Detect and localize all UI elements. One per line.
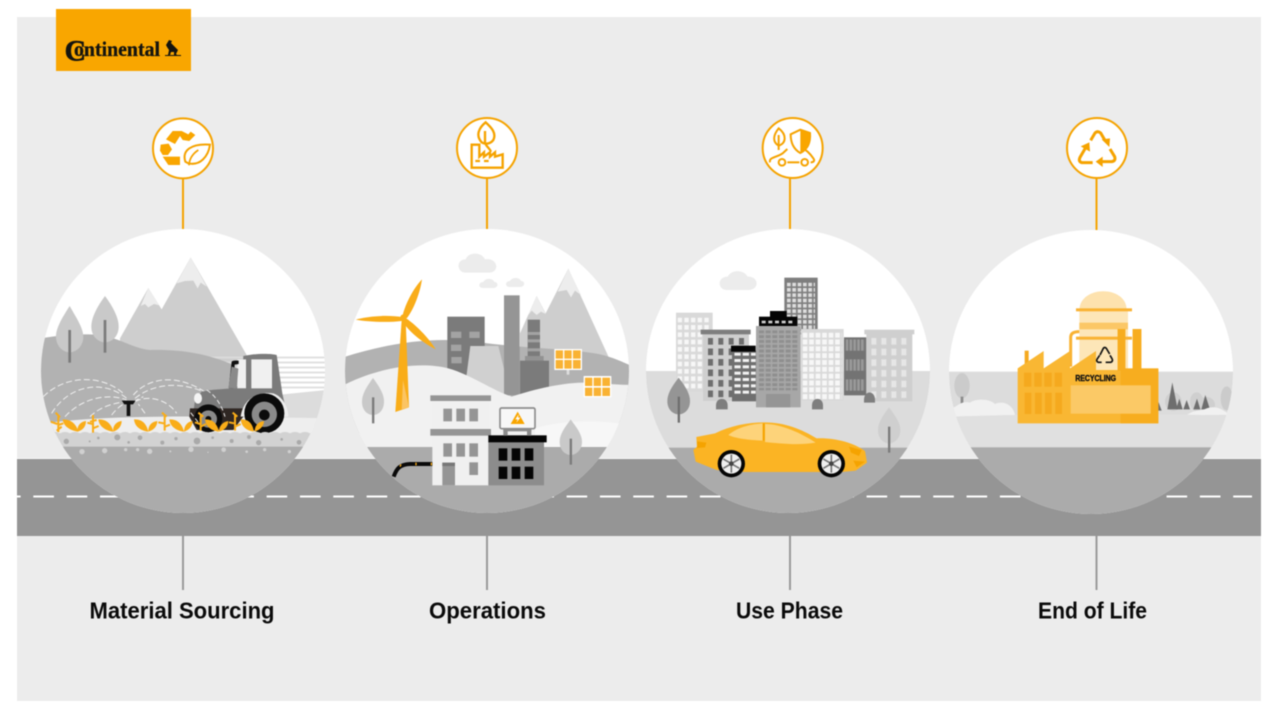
silo [1079,291,1127,310]
buildings [784,278,818,334]
wind turbine [356,279,436,412]
panel: end of life scene [949,230,1233,514]
cloud [720,271,757,290]
trees [56,306,83,352]
label: end of life: End of Life [1038,598,1147,624]
logo: Continental: ontinental [74,37,160,61]
icon: car, leaf and shield [763,118,823,178]
front hill [345,364,628,447]
rooftop [759,317,797,326]
mountains [520,276,608,357]
tractor [189,354,288,433]
factory [1018,329,1158,423]
icon: recycling triangle [1067,118,1127,178]
road [0,458,1261,536]
trees [362,378,384,415]
snow caps [141,257,207,307]
panel: operations scene [344,228,630,514]
snow caps [528,269,581,315]
cable [394,464,432,477]
label: use phase: Use Phase [736,598,843,624]
soil stones [64,434,301,445]
stripes [210,357,327,388]
back hill [344,340,630,397]
mountains [120,257,247,367]
logo: Continental [56,9,191,71]
icon: factory and leaf [457,118,517,178]
charging sign [500,408,535,436]
office building [432,446,489,486]
soil [55,431,310,448]
buildings [447,317,485,380]
dark building [488,442,544,485]
sprinkler [122,401,136,416]
bushes [716,392,875,409]
bushes [950,400,1015,417]
factory: RECYCLING [1075,373,1116,383]
label: operations: Operations [429,598,546,624]
clouds [459,254,524,288]
solar panels [554,349,582,375]
label: material sourcing: Material Sourcing [90,598,274,624]
connector lines [183,178,1096,590]
car [693,422,867,477]
crop plants [63,419,264,432]
panel: use phase scene [646,228,930,514]
hills [282,390,324,418]
ground [940,414,1250,450]
logo: Continental: C [64,34,86,68]
icon: recycling and leaf [153,118,213,178]
sprinkler spray [43,380,222,417]
panel: material sourcing scene [40,228,325,514]
field [50,416,316,434]
far trees [954,373,970,398]
trees [667,378,690,414]
